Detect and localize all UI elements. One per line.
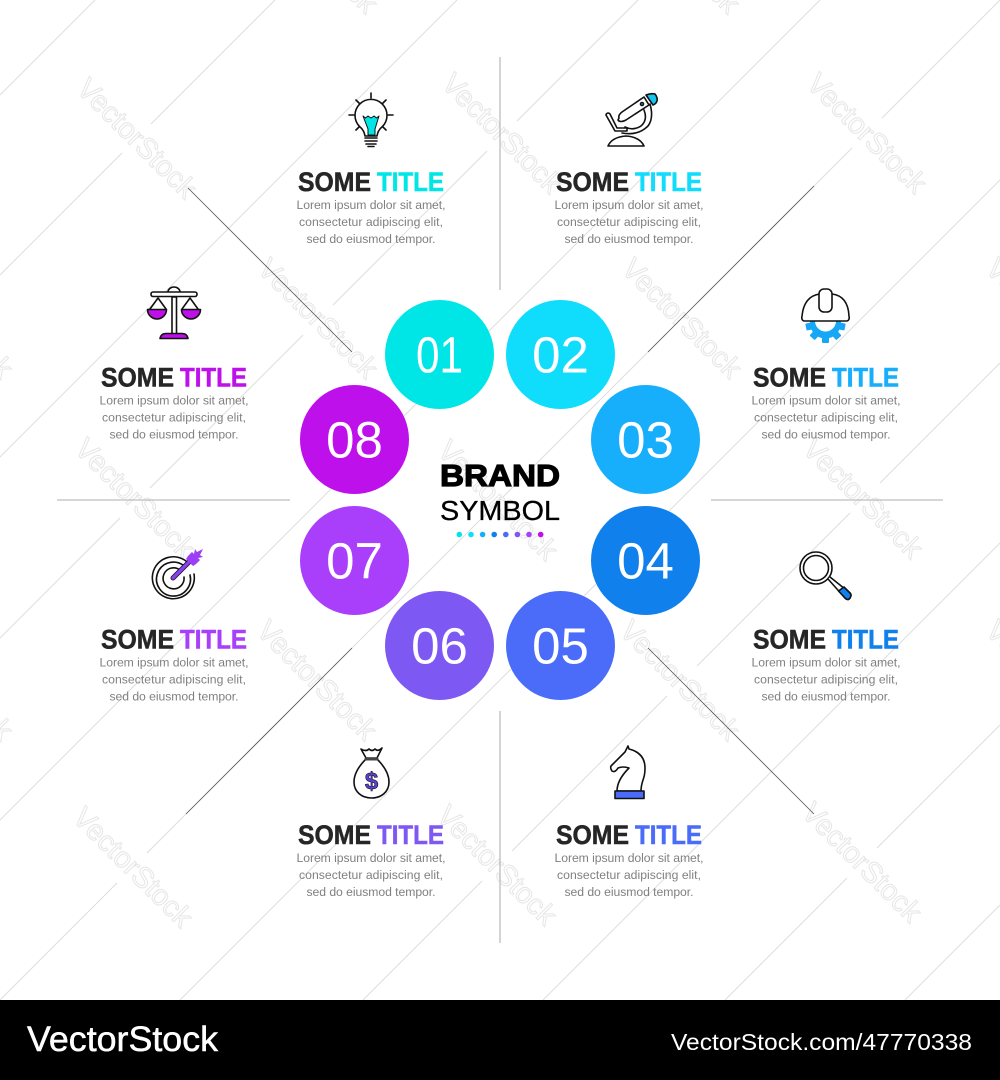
block 01 top left: [296, 93, 446, 246]
body text: consectetur adipiscing elit,: [557, 215, 701, 229]
footer url: VectorStock.com/47770338: [671, 1029, 972, 1055]
progress dots: [456, 532, 544, 537]
block 04 right lower: [752, 552, 900, 704]
block 04 right lower: TITLE: [832, 624, 899, 654]
icon: magnifying glass: [800, 552, 851, 600]
icon: money bag: [354, 748, 389, 798]
step 07 circle: 07: [326, 532, 383, 590]
block 07 left lower: [100, 549, 248, 704]
title: SOME: [101, 362, 174, 392]
symbol word: SYMBOL: [440, 495, 560, 526]
block 07 left lower: TITLE: [180, 624, 247, 654]
block 02 top right: TITLE: [635, 167, 702, 197]
body text: consectetur adipiscing elit,: [299, 868, 443, 882]
text: VectorStock: [68, 433, 201, 565]
text: VectorStock: [430, 800, 563, 932]
title: SOME: [556, 820, 629, 850]
text: VectorStock: [800, 68, 933, 200]
step 02 circle: [506, 300, 615, 409]
block 06 bottom left: TITLE: [377, 820, 444, 850]
body text: [554, 851, 704, 899]
text: VectorStock: [70, 73, 203, 205]
text: VectorStock: [795, 797, 928, 929]
text: VectorStock: [435, 68, 568, 200]
body text: sed do eiusmod tempor.: [110, 428, 238, 442]
body text: [100, 656, 248, 704]
body text: sed do eiusmod tempor.: [564, 885, 694, 899]
body text: consectetur adipiscing elit,: [102, 672, 246, 686]
text: VectorStock: [796, 433, 929, 565]
block 08 left upper: TITLE: [180, 362, 247, 392]
body text: sed do eiusmod tempor.: [762, 690, 890, 704]
body text: sed do eiusmod tempor.: [306, 232, 436, 246]
step 08 circle: 08: [326, 412, 383, 468]
title: SOME: [753, 362, 826, 392]
title: SOME: [753, 624, 826, 654]
body text: [296, 851, 446, 899]
block 02 top right: [554, 94, 704, 246]
body text: Lorem ipsum dolor sit amet,: [554, 851, 704, 865]
body text: sed do eiusmod tempor.: [564, 232, 694, 246]
step 02 circle: 02: [532, 326, 589, 384]
vertical and horizontal divider lines: [57, 57, 943, 943]
step 07 circle: [300, 506, 409, 615]
body text: sed do eiusmod tempor.: [110, 690, 238, 704]
text: VectorStock: [613, 615, 746, 747]
body text: [752, 394, 900, 442]
body text: Lorem ipsum dolor sit amet,: [100, 656, 248, 670]
block 01 top left: TITLE: [377, 167, 444, 197]
icon: helmet and gear: [802, 289, 849, 343]
icon: money bag: $: [365, 768, 379, 795]
body text: Lorem ipsum dolor sit amet,: [100, 394, 248, 408]
title: SOME: [101, 624, 174, 654]
icon: balance scales: [148, 287, 200, 338]
step 03 circle: 03: [617, 412, 674, 468]
icon: chess knight: [611, 746, 645, 798]
title: SOME: [298, 167, 371, 197]
step 06 circle: [385, 591, 494, 700]
block 08 left upper: [100, 287, 248, 442]
step 04 circle: 04: [617, 532, 674, 590]
body text: Lorem ipsum dolor sit amet,: [296, 851, 446, 865]
title: SOME: [556, 167, 629, 197]
step 01 circle: 01: [416, 326, 463, 384]
step 05 circle: 05: [532, 618, 589, 674]
body text: consectetur adipiscing elit,: [299, 215, 443, 229]
step 05 circle: [506, 591, 615, 700]
body text: [752, 656, 900, 704]
icon: target with dart: [152, 549, 203, 599]
body text: sed do eiusmod tempor.: [306, 885, 436, 899]
icon: light bulb: [349, 93, 393, 146]
body text: Lorem ipsum dolor sit amet,: [554, 198, 704, 212]
center brand logo: [440, 458, 560, 537]
step 01 circle: [385, 300, 494, 409]
block 05 bottom right: [554, 746, 704, 899]
block 05 bottom right: TITLE: [635, 820, 702, 850]
step 04 circle: [591, 506, 700, 615]
block 03 right upper: TITLE: [832, 362, 899, 392]
body text: [296, 198, 446, 246]
brand word: BRAND: [440, 458, 560, 493]
text: VectorStock: [251, 253, 384, 385]
body text: [100, 394, 248, 442]
step 06 circle: 06: [411, 618, 468, 674]
footer logo: VectorStock: [27, 1019, 218, 1059]
diagonal divider lines: [186, 186, 814, 814]
footer bar: [0, 1000, 1000, 1080]
text: VectorStock: [66, 802, 199, 934]
block 03 right upper: [752, 289, 900, 442]
body text: sed do eiusmod tempor.: [762, 428, 890, 442]
body text: [554, 198, 704, 246]
icon: microscope: [606, 94, 657, 146]
body text: consectetur adipiscing elit,: [557, 868, 701, 882]
body text: Lorem ipsum dolor sit amet,: [752, 656, 900, 670]
text: VectorStock: [431, 435, 564, 567]
body text: consectetur adipiscing elit,: [754, 410, 898, 424]
step 08 circle: [300, 385, 409, 494]
step 03 circle: [591, 385, 700, 494]
body text: consectetur adipiscing elit,: [754, 672, 898, 686]
block 06 bottom left: [296, 748, 446, 899]
title: SOME: [298, 820, 371, 850]
body text: Lorem ipsum dolor sit amet,: [752, 394, 900, 408]
body text: Lorem ipsum dolor sit amet,: [296, 198, 446, 212]
text: VectorStock: [615, 253, 748, 385]
body text: consectetur adipiscing elit,: [102, 410, 246, 424]
text: VectorStock: [250, 615, 383, 747]
